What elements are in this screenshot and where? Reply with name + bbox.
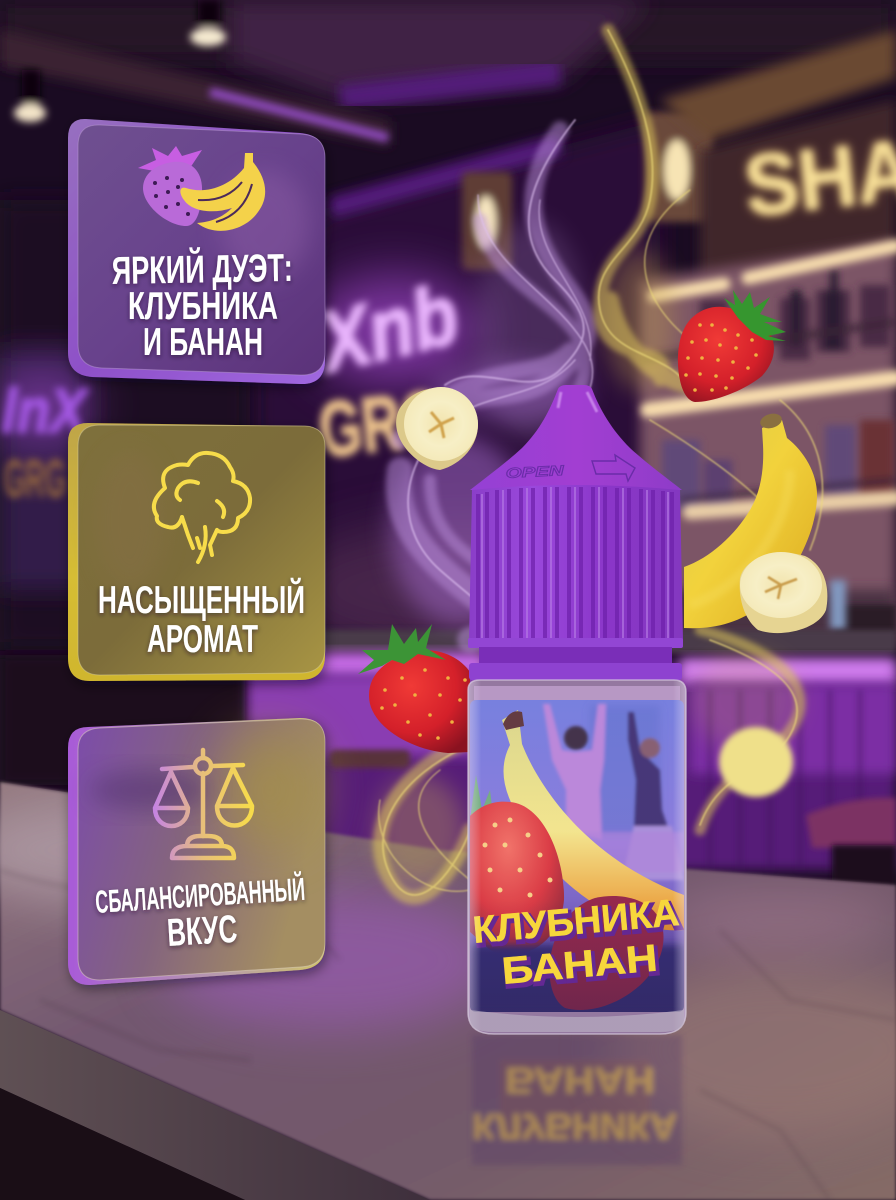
heading: bright duo: ЯРКИЙ ДУЭТ: — [111, 245, 293, 293]
label: lower dark area — [470, 945, 684, 1012]
product bottle — [468, 385, 686, 1034]
label text: klubnika banan — [471, 892, 683, 996]
heading: bright duo: КЛУБНИКА — [128, 285, 278, 328]
card 1: bright duo — [68, 119, 325, 384]
label text: klubnika banan: БАНАН — [500, 938, 659, 993]
product label — [468, 700, 684, 1012]
background: shelf glow strips — [648, 246, 896, 512]
background: back wall — [250, 120, 660, 640]
bottle cap nozzle — [470, 385, 682, 490]
heading: balanced taste: СБАЛАНСИРОВАННЫЙ — [94, 871, 306, 920]
fruit: banana slice top left — [396, 387, 478, 470]
card 3: balanced taste — [68, 718, 325, 985]
icon: aroma cloud — [154, 453, 250, 562]
label text: klubnika banan: БАНАН — [502, 941, 661, 996]
card 2: rich aroma — [68, 423, 325, 681]
background: ceiling — [0, 0, 896, 60]
background: bottles on shelves — [640, 270, 896, 630]
heading: bright duo — [111, 245, 293, 364]
fruit: banana whole behind bottle — [684, 411, 817, 628]
smoke: yellow — [375, 30, 822, 898]
heading: bright duo: И БАНАН — [143, 321, 263, 364]
icon: strawberry and banana — [138, 146, 265, 231]
counter front edge — [0, 1010, 430, 1200]
heading: rich aroma: НАСЫЩЕННЫЙ — [98, 577, 305, 622]
glass highlights — [468, 680, 686, 1034]
fruit: blurred banana slice — [719, 727, 793, 797]
label text: klubnika banan: КЛУБНИКА — [473, 895, 683, 955]
fruit: banana slice right — [740, 552, 827, 633]
cap ribbed body — [469, 485, 683, 640]
heading: rich aroma: АРОМАТ — [147, 618, 258, 661]
bottle reflection — [472, 1035, 682, 1165]
background: ceiling lights — [14, 0, 226, 122]
marble counter — [0, 782, 896, 1200]
bottle reflection: БАНАН — [505, 1060, 655, 1101]
bottle reflection: КЛУБНИКА — [472, 1106, 677, 1147]
label text: klubnika banan: КЛУБНИКА — [471, 892, 681, 952]
background: right upper wall — [700, 100, 896, 300]
label: lower strawberry — [549, 896, 663, 1010]
background: neon sign left: lnX — [2, 377, 89, 446]
cap collar — [468, 638, 683, 648]
background: bar front with neon strip — [240, 630, 896, 652]
heading: balanced taste: ВКУС — [166, 908, 238, 955]
glass body — [468, 680, 686, 1034]
fruit: strawberry top right — [678, 290, 786, 402]
label: large strawberry — [468, 802, 564, 955]
background: neon sign left — [0, 267, 480, 509]
background: right shelf wall — [640, 240, 896, 640]
fruit: strawberry left of bottle — [358, 624, 470, 753]
label: dancers — [542, 702, 684, 881]
heading: balanced taste — [94, 871, 306, 955]
cap embossed arrow — [592, 455, 635, 481]
background: stool — [806, 798, 896, 848]
smoke: purple — [390, 120, 593, 640]
label: banana — [502, 710, 684, 930]
background: wall lamps — [462, 112, 713, 270]
background: neon sign left: GRG — [4, 449, 66, 509]
cap embossed text: OPEN — [505, 462, 565, 481]
heading: rich aroma — [98, 577, 305, 661]
label: leaves — [470, 776, 492, 816]
icon: scales — [155, 750, 252, 858]
background: ceiling beam — [0, 30, 390, 146]
background: neon sign left: GRG — [315, 373, 448, 474]
background: neon sign left: Xnb — [308, 267, 467, 390]
